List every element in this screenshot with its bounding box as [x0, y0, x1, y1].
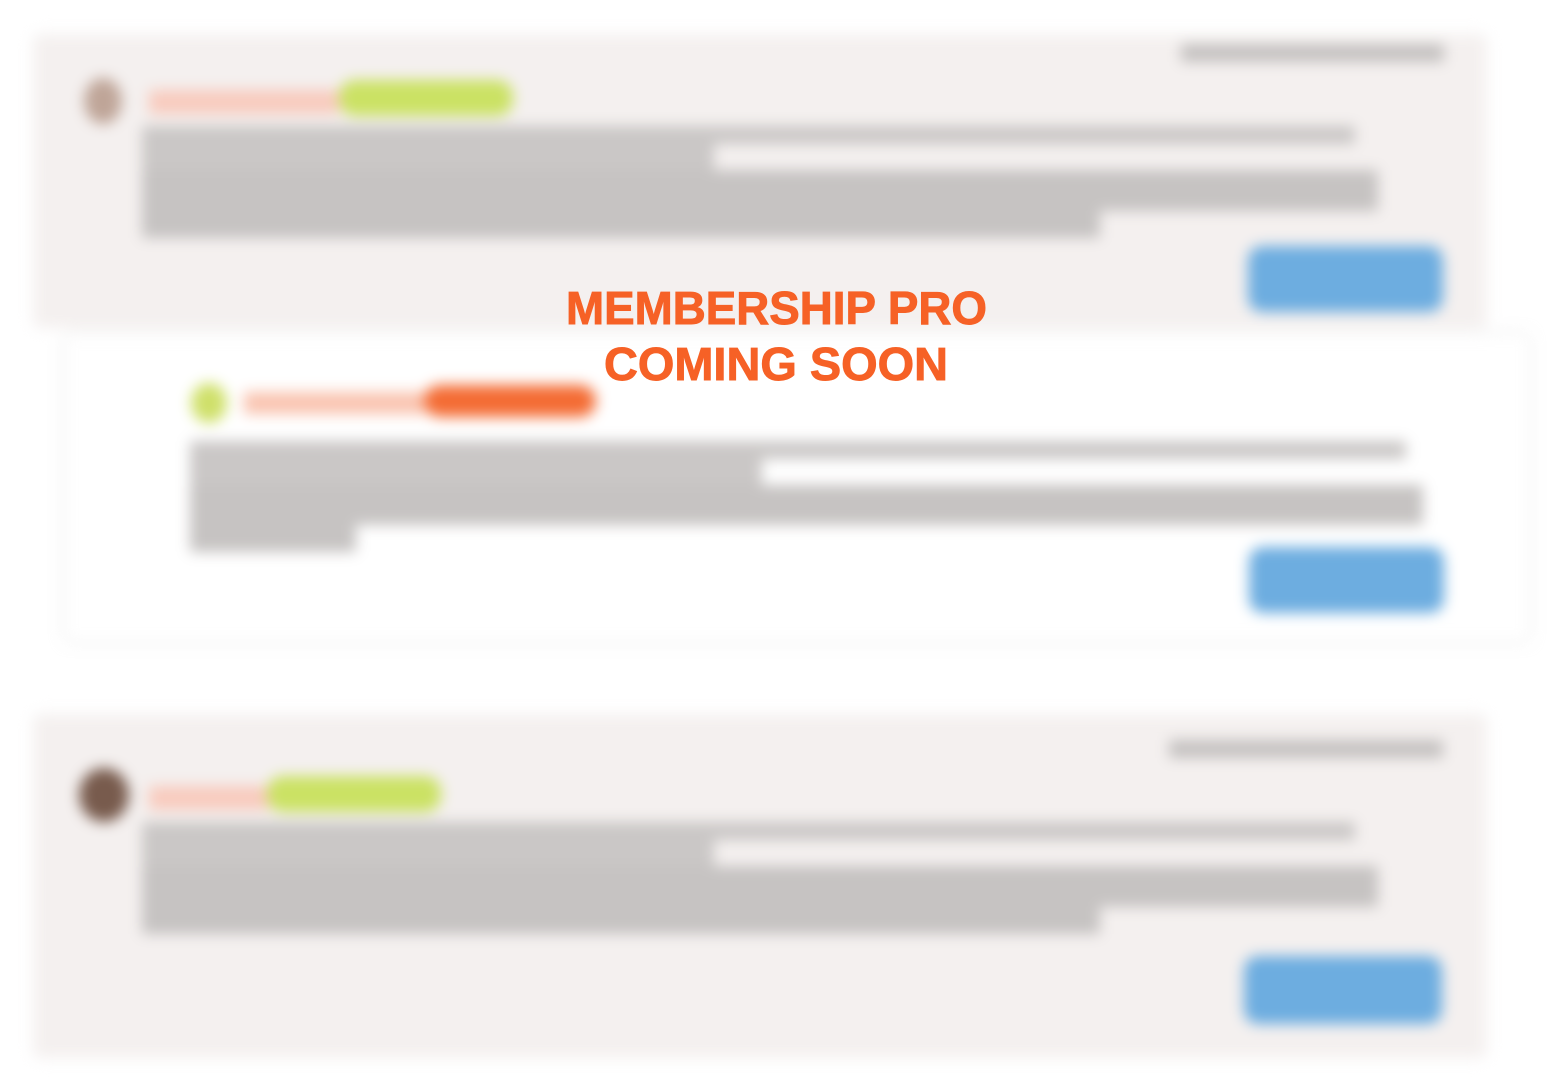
reply button [1248, 246, 1443, 312]
author name [149, 90, 339, 114]
post text [136, 816, 1384, 940]
panel: third post [35, 716, 1485, 1056]
reply button [1244, 956, 1442, 1024]
post text [136, 120, 1384, 244]
author name [149, 786, 269, 810]
avatar [79, 768, 129, 822]
avatar [84, 78, 122, 124]
role badge [339, 80, 513, 116]
panel: reply post [66, 335, 1528, 640]
panel: first post [35, 36, 1485, 326]
post text [182, 434, 1430, 560]
author name [244, 392, 426, 414]
title: MEMBERSHIP PRO [566, 282, 987, 334]
title: COMING SOON [604, 338, 948, 390]
post date [1181, 44, 1444, 62]
avatar [191, 383, 227, 423]
role badge [267, 776, 441, 812]
reply button [1249, 547, 1444, 613]
post date [1169, 740, 1443, 758]
role badge [424, 385, 596, 417]
